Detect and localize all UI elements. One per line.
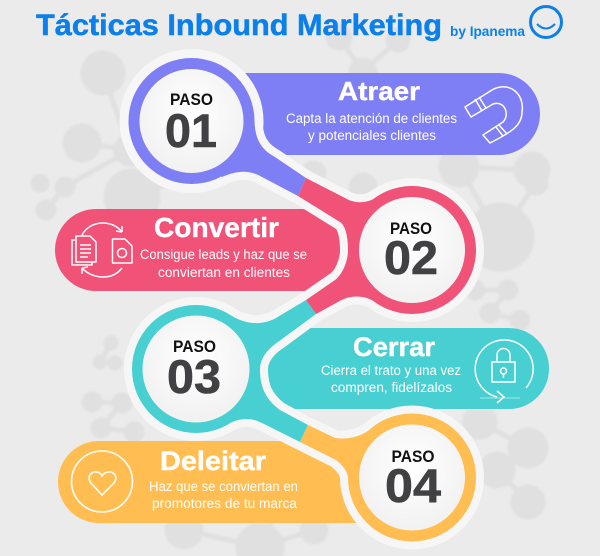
panel: Deleitar: Haz que se conviertan en (149, 479, 298, 494)
panel: Deleitar (58, 441, 400, 523)
step 4 badge: 04 (385, 459, 441, 512)
step 3 badge: PASO (173, 338, 216, 356)
white halo outline around the step path (128, 57, 476, 542)
panel: Atraer (150, 73, 540, 155)
icon: smiley logo (530, 6, 562, 38)
step 1 badge (128, 58, 306, 196)
step 2 badge: PASO (390, 220, 432, 238)
step 4 badge (300, 414, 476, 542)
step 3 badge (132, 300, 316, 442)
step 1 badge: PASO (170, 91, 213, 109)
panel: Cerrar: compren, fidelízalos (331, 380, 452, 395)
panel: Convertir: conviertan en clientes (158, 265, 290, 280)
panel: Cerrar: Cerrar (353, 332, 435, 362)
panel: Deleitar: promotores de tu marca (152, 496, 297, 511)
icon: documents with cycle arrows (72, 223, 132, 277)
icon: magnet (465, 87, 522, 143)
step 3 badge: 03 (167, 350, 221, 403)
icon: padlock with circular arrow (475, 340, 533, 403)
step 2 badge (298, 178, 476, 314)
panel: Cerrar: Cierra el trato y una vez (321, 363, 461, 378)
step 4 badge: PASO (392, 448, 435, 466)
panel: Atraer: Capta la atención de clientes (286, 111, 457, 126)
panel: Convertir: Consigue leads y haz que se (140, 247, 307, 262)
icon: heart in circle (72, 451, 132, 512)
step 2 badge: 02 (384, 231, 438, 284)
panel: Cerrar (240, 328, 549, 409)
panel: Atraer: Atraer (338, 76, 420, 106)
panel: Deleitar: Deleitar (160, 446, 267, 476)
title: Tácticas Inbound Marketing (36, 9, 442, 42)
byline: by Ipanema (450, 23, 525, 39)
panel: Convertir: Convertir (154, 212, 279, 243)
panel: Atraer: y potenciales clientes (308, 128, 436, 143)
step 1 badge: 01 (165, 104, 217, 157)
panel: Convertir (55, 209, 400, 291)
